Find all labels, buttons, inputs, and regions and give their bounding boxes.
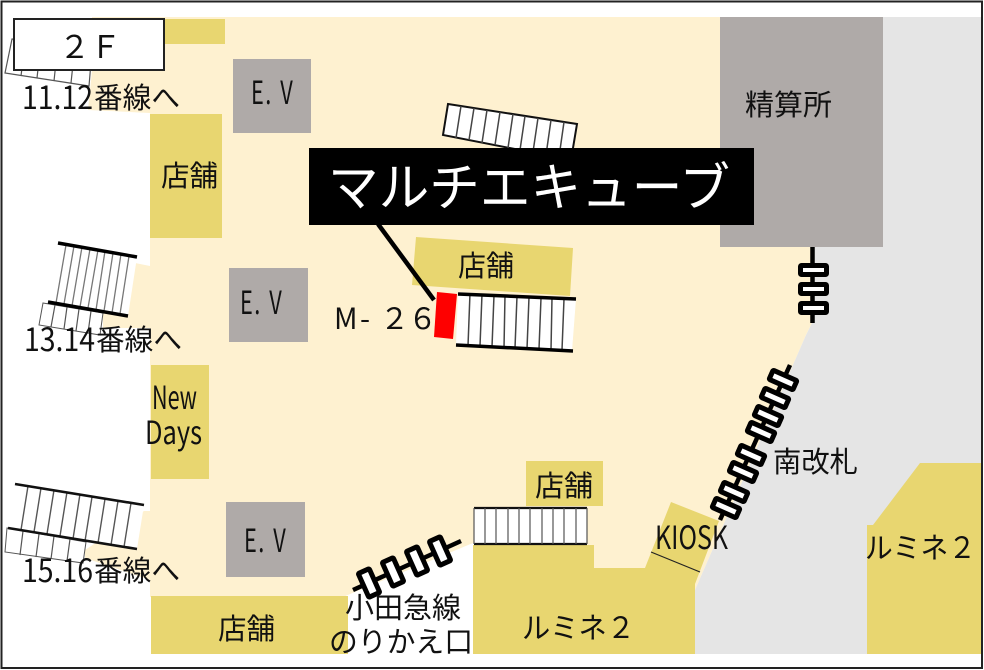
shop: bottom left: 店舗 (218, 606, 275, 648)
stairs: to platforms 13/14 (39, 243, 137, 335)
label: platforms 13/14 (24, 315, 182, 361)
label: platforms 15/16: 15.16 (22, 546, 93, 592)
stairs: to platforms 15/16 (5, 484, 144, 563)
label: platforms 11/12 (22, 73, 180, 119)
label: Odakyu transfer (329, 585, 473, 661)
shop: bottom left (151, 596, 348, 654)
shop: Lumine 2 and KIOSK: KIOSK (655, 513, 728, 559)
area: ticket gate zone (695, 17, 981, 654)
shop: NewDays: New (152, 373, 197, 419)
shop: small lower: 店舗 (535, 463, 593, 505)
stairs: centre lower (456, 292, 576, 351)
shop: tilted centre (412, 237, 573, 296)
fare adjustment office (720, 17, 883, 247)
location marker: M-26 (434, 292, 457, 339)
elevator 2 (229, 268, 308, 342)
elevator 3: E.V (244, 515, 286, 561)
fare adjustment office: 精算所 (745, 82, 832, 124)
gate: east (800, 247, 826, 323)
shop: Lumine 2 and KIOSK (473, 502, 728, 654)
label: platforms 13/14: 13.14 (24, 315, 95, 361)
elevator 3 (226, 502, 305, 577)
area: station concourse (85, 17, 812, 597)
label: Odakyu transfer: 小田急線 (345, 585, 461, 627)
label: platforms 11/12: 11.12 (22, 73, 93, 119)
shop: left upper: 店舗 (161, 153, 218, 195)
label: platforms 11/12: 番線へ (94, 75, 180, 117)
floor badge: 2F (14, 19, 164, 70)
shop: left upper (150, 114, 222, 238)
gate: south (712, 365, 797, 520)
shop: Lumine 2 right (865, 463, 981, 654)
floor badge: 2F: ２Ｆ (59, 22, 121, 67)
label: Odakyu transfer: のりかえ口 (329, 619, 473, 661)
elevator 1 (233, 59, 311, 133)
label: platforms 13/14: 番線へ (96, 317, 182, 359)
label: south gate: 南改札 (773, 439, 858, 481)
shop: NewDays (145, 365, 209, 479)
stairs: centre upper (443, 104, 577, 160)
shop: Lumine 2 and KIOSK: ルミネ２ (522, 605, 635, 647)
shop: tilted centre: 店舗 (458, 243, 514, 285)
label: platforms 15/16: 番線へ (94, 548, 180, 590)
label: M-26: M-２６ (334, 296, 437, 338)
elevator 1: E.V (251, 67, 293, 113)
stairs: to platforms 11/12 (5, 39, 92, 86)
gate: Odakyu transfer (353, 537, 461, 597)
elevator 2: E.V (240, 277, 282, 323)
shop: NewDays: Days (145, 408, 202, 454)
callout: Multi Ekyube: マルチエキューブ (328, 146, 730, 221)
shop: top block (164, 19, 225, 44)
stairs: lower centre (474, 508, 587, 544)
label: platforms 15/16 (22, 546, 180, 592)
leader line (378, 224, 434, 300)
shop: Lumine 2 right: ルミネ２ (865, 525, 976, 567)
